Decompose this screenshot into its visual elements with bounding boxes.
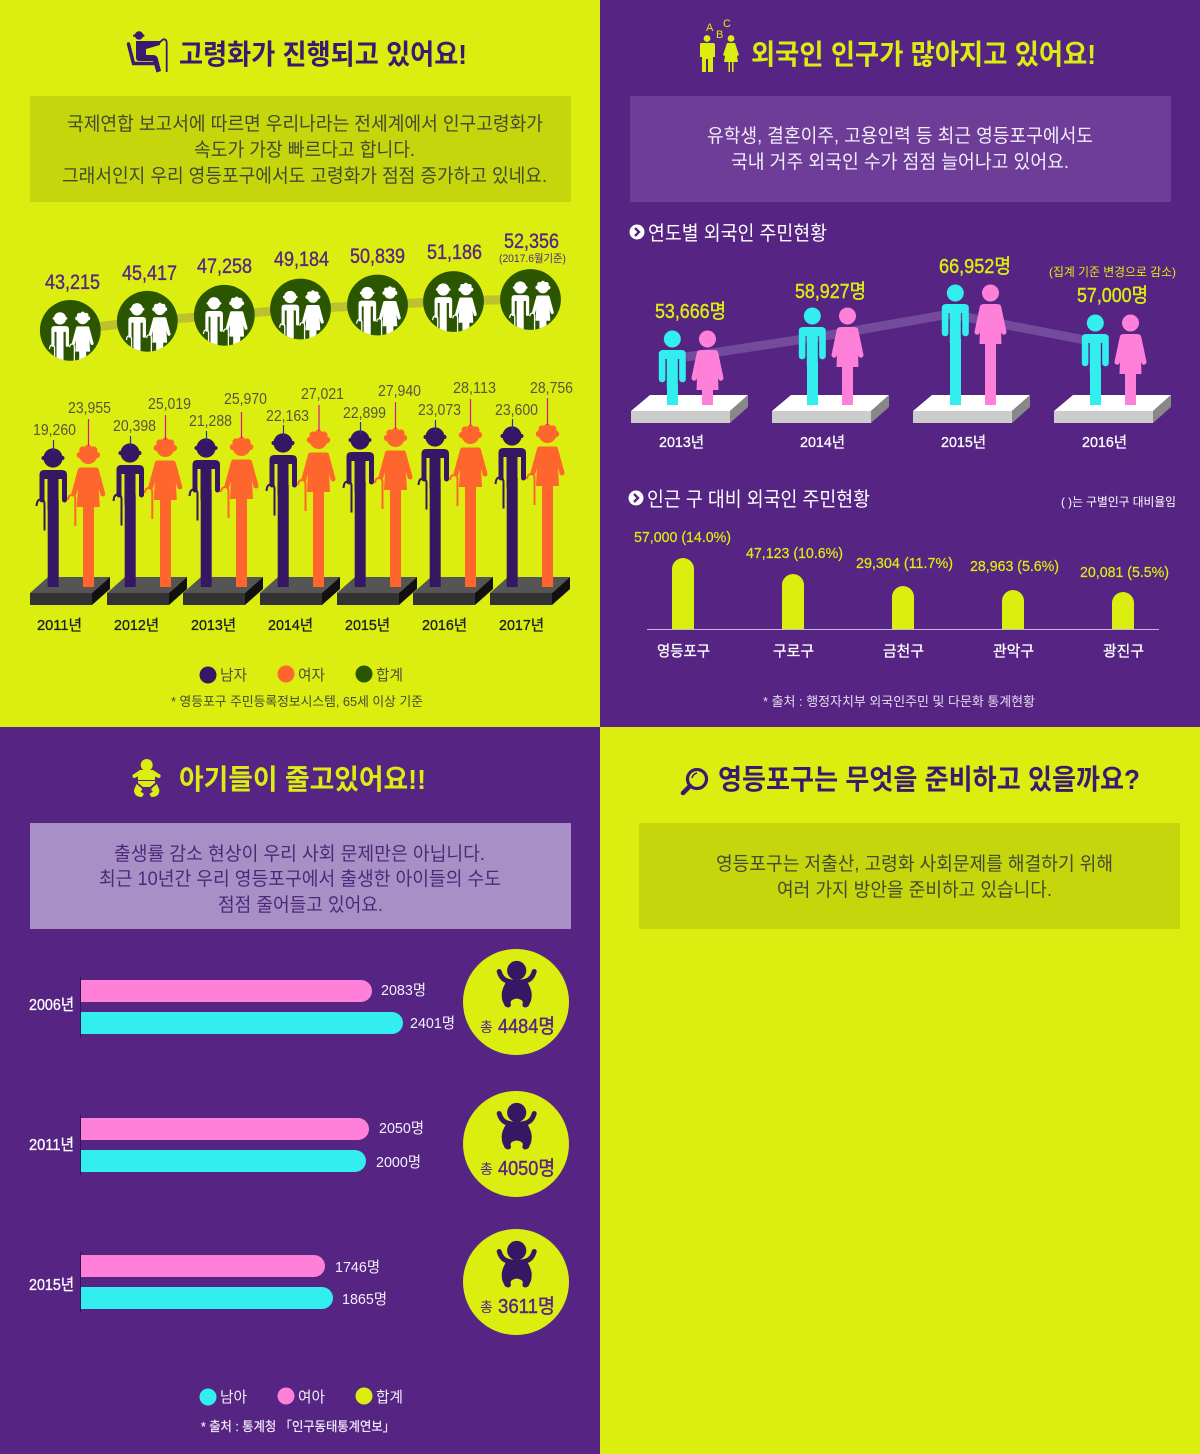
icon: baby bbox=[132, 759, 161, 797]
total badge 2011: 4050명 bbox=[498, 1157, 555, 1180]
title: aging: 고령화가 진행되고 있어요! bbox=[179, 39, 467, 70]
bar chart: births 2006 bbox=[29, 977, 455, 1037]
bar chart: births 2006: 2401명 bbox=[410, 1015, 455, 1032]
title: foreigners: 외국인 인구가 많아지고 있어요! bbox=[751, 39, 1096, 70]
bar chart: districts: 57,000 (14.0%) bbox=[634, 529, 731, 546]
legend: babies bbox=[200, 1388, 403, 1406]
legend: babies: 남아 bbox=[220, 1389, 247, 1406]
chart: total elderly trend: 50,839 bbox=[350, 245, 405, 268]
bar chart: districts: 광진구 bbox=[1103, 643, 1144, 660]
text box: foreigners intro: 국내 거주 외국인 수가 점점 늘어나고 있어요. bbox=[731, 151, 1069, 173]
chart: elderly men and women by year: 28,756 bbox=[530, 380, 573, 397]
bar chart: births 2011: 2011년 bbox=[29, 1136, 74, 1154]
total badge 2006: 4484명 bbox=[498, 1015, 555, 1038]
text box: babies intro: 출생률 감소 현상이 우리 사회 문제만은 아닙니다. bbox=[114, 843, 485, 865]
text box: babies intro: 최근 10년간 우리 영등포구에서 출생한 아이들의 수도 bbox=[99, 868, 501, 890]
title: babies: 아기들이 줄고있어요!! bbox=[179, 764, 426, 795]
legend: aging: 합계 bbox=[376, 667, 403, 684]
total badge 2015: 3611명 bbox=[498, 1295, 555, 1318]
chart: elderly men and women by year: 23,955 bbox=[68, 400, 111, 417]
chart: elderly men and women by year: 28,113 bbox=[453, 380, 496, 397]
panel: foreigners bbox=[600, 0, 1200, 727]
text box: aging intro bbox=[30, 96, 571, 202]
bar chart: births 2011 bbox=[29, 1115, 424, 1175]
chart: total elderly trend: 49,184 bbox=[274, 248, 329, 271]
legend: babies: 여아 bbox=[298, 1389, 325, 1406]
chart: yearly foreign residents: 53,666명 bbox=[655, 300, 726, 323]
chart: total elderly trend: 52,356 bbox=[504, 230, 559, 253]
total badge 2015: 총 bbox=[480, 1299, 493, 1315]
total badge 2011: 총 bbox=[480, 1161, 493, 1177]
chart: elderly men and women by year: 23,600 bbox=[495, 402, 538, 419]
chart: yearly foreign residents: (집계 기준 변경으로 감소) bbox=[1049, 265, 1176, 279]
source note: babies: * 출처 : 통계청 「인구동태통계연보」 bbox=[201, 1419, 395, 1434]
panel: aging bbox=[0, 0, 600, 727]
chart: yearly foreign residents: 2015년 bbox=[941, 434, 986, 451]
bar chart: births 2015 bbox=[29, 1252, 387, 1312]
chart: elderly men and women by year: 2015년 bbox=[345, 617, 390, 634]
chart: yearly foreign residents: 57,000명 bbox=[1077, 284, 1148, 307]
legend: babies: 합계 bbox=[376, 1389, 403, 1406]
bar chart: births 2011: 2000명 bbox=[376, 1154, 421, 1171]
text box: measures intro: 여러 가지 방안을 준비하고 있습니다. bbox=[777, 879, 1052, 901]
icon: seated elder with cane bbox=[128, 31, 167, 72]
chart: elderly men and women by year: 19,260 bbox=[33, 422, 76, 439]
chart: elderly men and women by year: 22,899 bbox=[343, 405, 386, 422]
chart: total elderly trend: 47,258 bbox=[197, 255, 252, 278]
chart: yearly foreign residents: 58,927명 bbox=[795, 280, 866, 303]
chart: elderly men and women by year bbox=[30, 380, 573, 634]
source note: foreigners: * 출처 : 행정자치부 외국인주민 및 다문화 통계현황 bbox=[763, 694, 1035, 709]
text box: measures intro bbox=[639, 823, 1180, 929]
icon: people with letters: B bbox=[716, 29, 723, 41]
text box: foreigners intro bbox=[630, 96, 1171, 202]
total badge 2006 bbox=[463, 949, 569, 1055]
bar chart: births 2006: 2083명 bbox=[381, 982, 426, 999]
bar chart: births 2011: 2050명 bbox=[379, 1120, 424, 1137]
panel: measures bbox=[600, 727, 1200, 1454]
text box: measures intro: 영등포구는 저출산, 고령화 사회문제를 해결하기 위해 bbox=[716, 853, 1113, 875]
chart: elderly men and women by year: 2016년 bbox=[422, 617, 467, 634]
panel: babies bbox=[0, 727, 600, 1454]
icon: people with letters bbox=[700, 18, 739, 72]
icon: magnifier bbox=[683, 770, 706, 793]
chart: elderly men and women by year: 2012년 bbox=[114, 617, 159, 634]
text box: babies intro: 점점 줄어들고 있어요. bbox=[218, 894, 383, 916]
bar chart: births 2006: 2006년 bbox=[29, 996, 74, 1014]
chart: yearly foreign residents: 2013년 bbox=[659, 434, 704, 451]
chart: elderly men and women by year: 2011년 bbox=[37, 617, 82, 634]
chart: total elderly trend: 45,417 bbox=[122, 262, 177, 285]
heading: yearly foreign residents: 연도별 외국인 주민현황 bbox=[648, 222, 827, 245]
note: ratio: ( )는 구별인구 대비율임 bbox=[1061, 495, 1176, 509]
chart: elderly men and women by year: 2014년 bbox=[268, 617, 313, 634]
bar chart: districts: 영등포구 bbox=[657, 643, 710, 660]
chart: elderly men and women by year: 25,970 bbox=[224, 391, 267, 408]
total badge 2011 bbox=[463, 1091, 569, 1197]
bar chart: districts bbox=[634, 529, 1169, 660]
bar chart: districts: 금천구 bbox=[883, 643, 924, 660]
chart: yearly foreign residents: 2014년 bbox=[800, 434, 845, 451]
chart: elderly men and women by year: 20,398 bbox=[113, 418, 156, 435]
bar chart: births 2015: 1865명 bbox=[342, 1291, 387, 1308]
bar chart: districts: 20,081 (5.5%) bbox=[1080, 564, 1169, 581]
chart: elderly men and women by year: 21,288 bbox=[189, 413, 232, 430]
legend: aging: 여자 bbox=[298, 667, 325, 684]
chart: elderly men and women by year: 27,021 bbox=[301, 386, 344, 403]
chart: total elderly trend: (2017.6월기준) bbox=[499, 252, 566, 265]
chart: elderly men and women by year: 2017년 bbox=[499, 617, 544, 634]
bar chart: districts: 28,963 (5.6%) bbox=[970, 558, 1059, 575]
bar chart: districts: 47,123 (10.6%) bbox=[746, 545, 843, 562]
text box: aging intro: 속도가 가장 빠르다고 합니다. bbox=[194, 139, 415, 161]
text box: babies intro bbox=[30, 823, 571, 929]
chart: total elderly trend: 51,186 bbox=[427, 241, 482, 264]
title: measures: 영등포구는 무엇을 준비하고 있을까요? bbox=[718, 764, 1140, 795]
bar chart: districts: 관악구 bbox=[993, 643, 1034, 660]
chart: elderly men and women by year: 27,940 bbox=[378, 383, 421, 400]
chart: elderly men and women by year: 25,019 bbox=[148, 396, 191, 413]
chart: elderly men and women by year: 2013년 bbox=[191, 617, 236, 634]
chart: yearly foreign residents: 66,952명 bbox=[939, 255, 1011, 278]
bar chart: districts: 29,304 (11.7%) bbox=[856, 555, 953, 572]
chart: yearly foreign residents bbox=[631, 255, 1176, 451]
text box: foreigners intro: 유학생, 결혼이주, 고용인력 등 최근 영등포구에서도 bbox=[707, 125, 1093, 147]
source note: aging: * 영등포구 주민등록정보시스템, 65세 이상 기준 bbox=[171, 694, 423, 709]
bar chart: births 2015: 1746명 bbox=[335, 1259, 380, 1276]
total badge 2015 bbox=[463, 1229, 569, 1335]
icon: people with letters: C bbox=[723, 18, 731, 30]
total badge 2006: 총 bbox=[480, 1019, 493, 1035]
icon: people with letters: A bbox=[706, 22, 714, 34]
bar chart: births 2015: 2015년 bbox=[29, 1276, 74, 1294]
text box: aging intro: 그래서인지 우리 영등포구에서도 고령화가 점점 증가하고 있네요. bbox=[62, 165, 547, 187]
text box: aging intro: 국제연합 보고서에 따르면 우리나라는 전세계에서 인구고령화가 bbox=[67, 113, 543, 135]
heading: district comparison: 인근 구 대비 외국인 주민현황 bbox=[647, 488, 870, 511]
chart: elderly men and women by year: 23,073 bbox=[418, 402, 461, 419]
chart: yearly foreign residents: 2016년 bbox=[1082, 434, 1127, 451]
legend: aging: 남자 bbox=[220, 667, 247, 684]
chart: total elderly trend: 43,215 bbox=[45, 271, 100, 294]
chart: total elderly trend bbox=[40, 230, 566, 389]
bar chart: districts: 구로구 bbox=[773, 643, 814, 660]
legend: aging bbox=[200, 666, 403, 684]
chart: elderly men and women by year: 22,163 bbox=[266, 408, 309, 425]
